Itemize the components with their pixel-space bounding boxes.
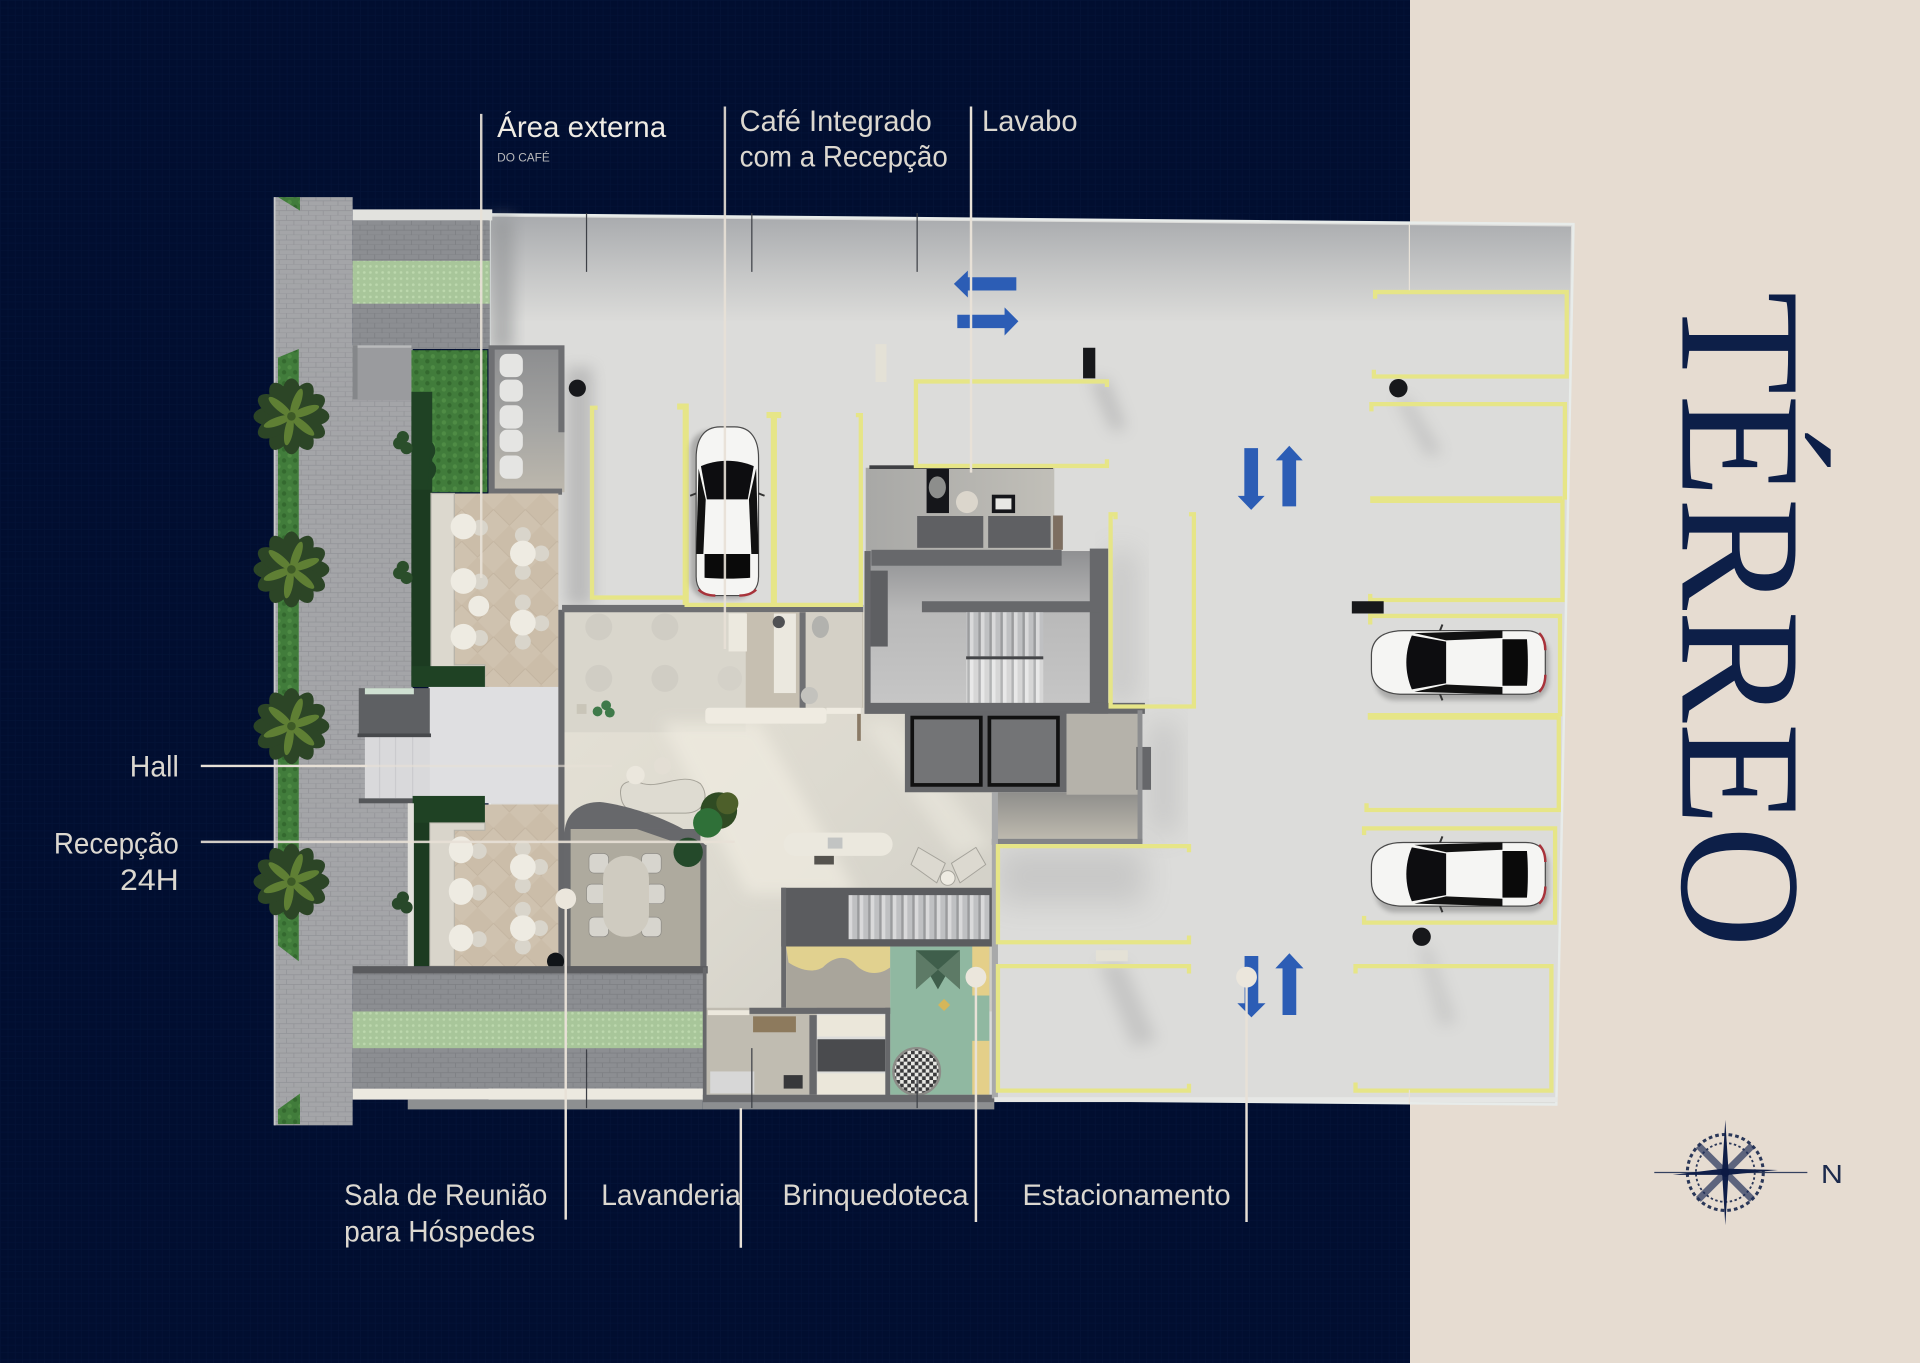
- callout: Área externa: [481, 111, 667, 578]
- callout: Sala de Reunião: Sala de Reunião: [344, 1179, 547, 1212]
- café counter and kitchen: [705, 612, 863, 741]
- terrace upper: [414, 493, 558, 687]
- callout: Café Integrado: Café Integrado: [740, 105, 932, 138]
- elevators: [905, 711, 1067, 792]
- callout: Recepção 24H: [54, 827, 735, 897]
- laundry: [703, 967, 997, 1109]
- hall: [358, 687, 558, 803]
- reception desk: [784, 833, 893, 865]
- car: upper horizontal: [1371, 624, 1549, 700]
- palms: [253, 378, 329, 920]
- café tables: [585, 613, 742, 692]
- callout: Estacionamento: Estacionamento: [1022, 1179, 1231, 1212]
- compass label: N: [1821, 1161, 1843, 1189]
- sidewalk: [274, 197, 413, 1125]
- thin section lines: [587, 213, 917, 1108]
- reception sofa: [621, 766, 705, 813]
- reception plant: [693, 792, 738, 838]
- bollards and pillars: [569, 344, 1431, 961]
- floor plan: [253, 197, 1573, 1125]
- callout: Área externa: Área externa: [497, 111, 667, 144]
- callout: Sala de Reunião: [344, 888, 576, 1249]
- rear stairs: [781, 888, 993, 1010]
- callout: Estacionamento: [1022, 967, 1257, 1222]
- callout: Café Integrado: [725, 105, 948, 649]
- car: lower horizontal: [1371, 836, 1549, 912]
- callout: Recepção 24H: 24H: [120, 864, 179, 897]
- background: beige panel: [1410, 0, 1920, 1363]
- title: TÉRREO: [1644, 291, 1835, 948]
- arrows: vertical pair upper: [1238, 446, 1303, 510]
- garden upper: [393, 350, 487, 687]
- armchairs: [911, 847, 986, 885]
- top walkway: [353, 209, 492, 400]
- icon: compass: [1654, 1120, 1807, 1225]
- lobby and café floor: [558, 605, 993, 1011]
- parking lines: [592, 292, 1567, 1091]
- parking floor: [490, 214, 1573, 1105]
- café plants: [577, 700, 615, 718]
- floor shadows: [566, 367, 1457, 1047]
- callout: Brinquedoteca: Brinquedoteca: [782, 1179, 969, 1212]
- callout: Recepção 24H: Recepção: [54, 827, 179, 860]
- bottom walkway: [353, 966, 708, 1109]
- playroom: [786, 947, 989, 1096]
- grass strip: [278, 197, 300, 1124]
- service core: [864, 465, 1145, 714]
- terrace lower: [392, 796, 558, 967]
- callout: Lavanderia: Lavanderia: [601, 1179, 741, 1212]
- deck with stools: [489, 345, 564, 495]
- callout: Área externa: DO CAFÉ: [497, 150, 550, 165]
- floor right of elevators: [992, 710, 1558, 1102]
- callout: Hall: [130, 750, 671, 783]
- meeting room: [547, 802, 707, 973]
- callout: Hall: Hall: [130, 750, 179, 783]
- callout: Sala de Reunião: para Hóspedes: [344, 1216, 535, 1249]
- faint panel edge over floor: [1408, 224, 1410, 1105]
- callout: Lavabo: Lavabo: [982, 105, 1078, 138]
- arrows: horizontal pair: [954, 271, 1018, 336]
- callout: Café Integrado: com a Recepção: [740, 141, 948, 174]
- callout: Brinquedoteca: [782, 967, 986, 1222]
- background: navy panel: [0, 0, 1411, 1363]
- arrows: vertical pair lower: [1237, 953, 1303, 1017]
- car: vertical: [690, 427, 765, 599]
